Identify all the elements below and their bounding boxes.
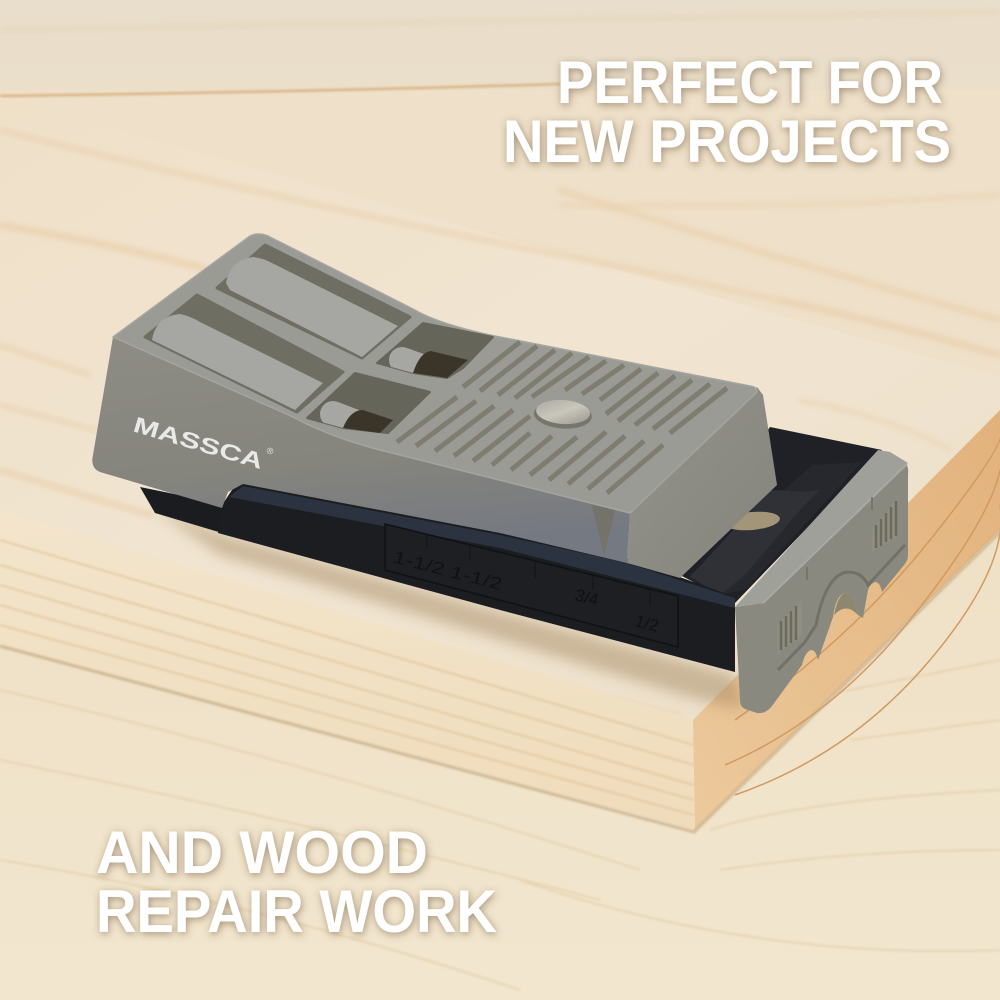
dowel well: back short: [377, 323, 493, 378]
board top face: [0, 97, 1000, 720]
cap step edges: [807, 497, 872, 580]
black tray back: [670, 427, 882, 603]
gray body top face: [113, 234, 757, 513]
magnet: [533, 398, 593, 430]
board contact shadow: [0, 532, 1000, 832]
board grain lines: [0, 130, 1000, 715]
base top bevel: [229, 486, 735, 608]
heading: bottom left: AND WOOD: [96, 819, 428, 886]
board front grain: [0, 540, 694, 815]
gray body side face: [627, 387, 777, 578]
arch interior: [834, 593, 858, 615]
dowel well: front long: [145, 295, 343, 412]
cap top rim: [735, 450, 908, 607]
gray body front face: [92, 337, 630, 563]
vent slots lower: [397, 397, 663, 493]
wood board: [0, 97, 1000, 832]
ruler recess with scale: 1/2: [633, 611, 661, 636]
heading: bottom left: REPAIR WORK: [96, 878, 497, 945]
cap raised arch relief: [778, 545, 905, 670]
ruler recess with scale: [385, 524, 678, 647]
cap front edge highlight: [763, 464, 907, 603]
end grain lines: [725, 430, 1000, 795]
brand logo: ®: [265, 445, 275, 457]
board end face: [693, 410, 1000, 830]
dowel well: front short: [307, 373, 430, 433]
cap body with arch cutouts: [735, 463, 908, 713]
brand logo: [131, 412, 275, 474]
black base tab: [140, 487, 228, 533]
heading: bottom left: [96, 819, 497, 945]
vent slots upper: [463, 342, 727, 433]
ruler recess with scale: 3/4: [573, 585, 601, 610]
drill jig: [92, 234, 908, 713]
heading: top right: NEW PROJECTS: [503, 108, 951, 175]
ruler labels: 1-1/2 1-1/2: [391, 547, 504, 594]
heading: top right: [503, 49, 951, 175]
left grip ribs: [777, 600, 802, 655]
board front face: [0, 510, 695, 830]
front notch: [592, 505, 615, 556]
jig shadow: [150, 505, 745, 710]
brand logo: MASSCA: [131, 412, 266, 474]
heading: top right: PERFECT FOR: [557, 49, 943, 116]
black base front: [218, 480, 735, 672]
gray end cap: [735, 450, 908, 713]
dowel well: back long: [217, 245, 410, 358]
right grip ribs: [872, 497, 898, 552]
